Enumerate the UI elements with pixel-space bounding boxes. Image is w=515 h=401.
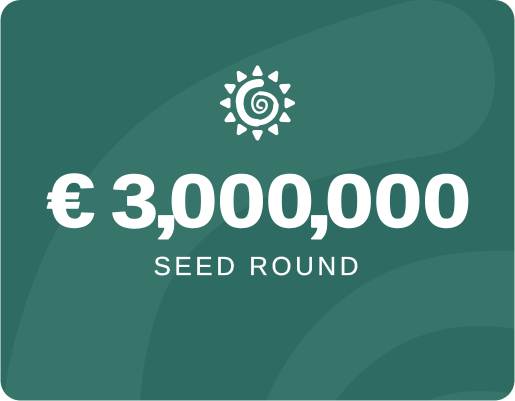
subtitle: SEED ROUND: [154, 251, 358, 281]
amount heading: €: [47, 159, 95, 243]
amount heading: ,: [152, 159, 180, 243]
spiral: [240, 83, 276, 123]
amount heading: 3: [111, 159, 158, 243]
amount heading: 000: [169, 159, 314, 243]
amount heading: ,: [305, 159, 333, 243]
amount heading: 000: [325, 159, 471, 243]
icon: spiral sun logo: [222, 68, 293, 138]
sun rays: [222, 68, 293, 138]
